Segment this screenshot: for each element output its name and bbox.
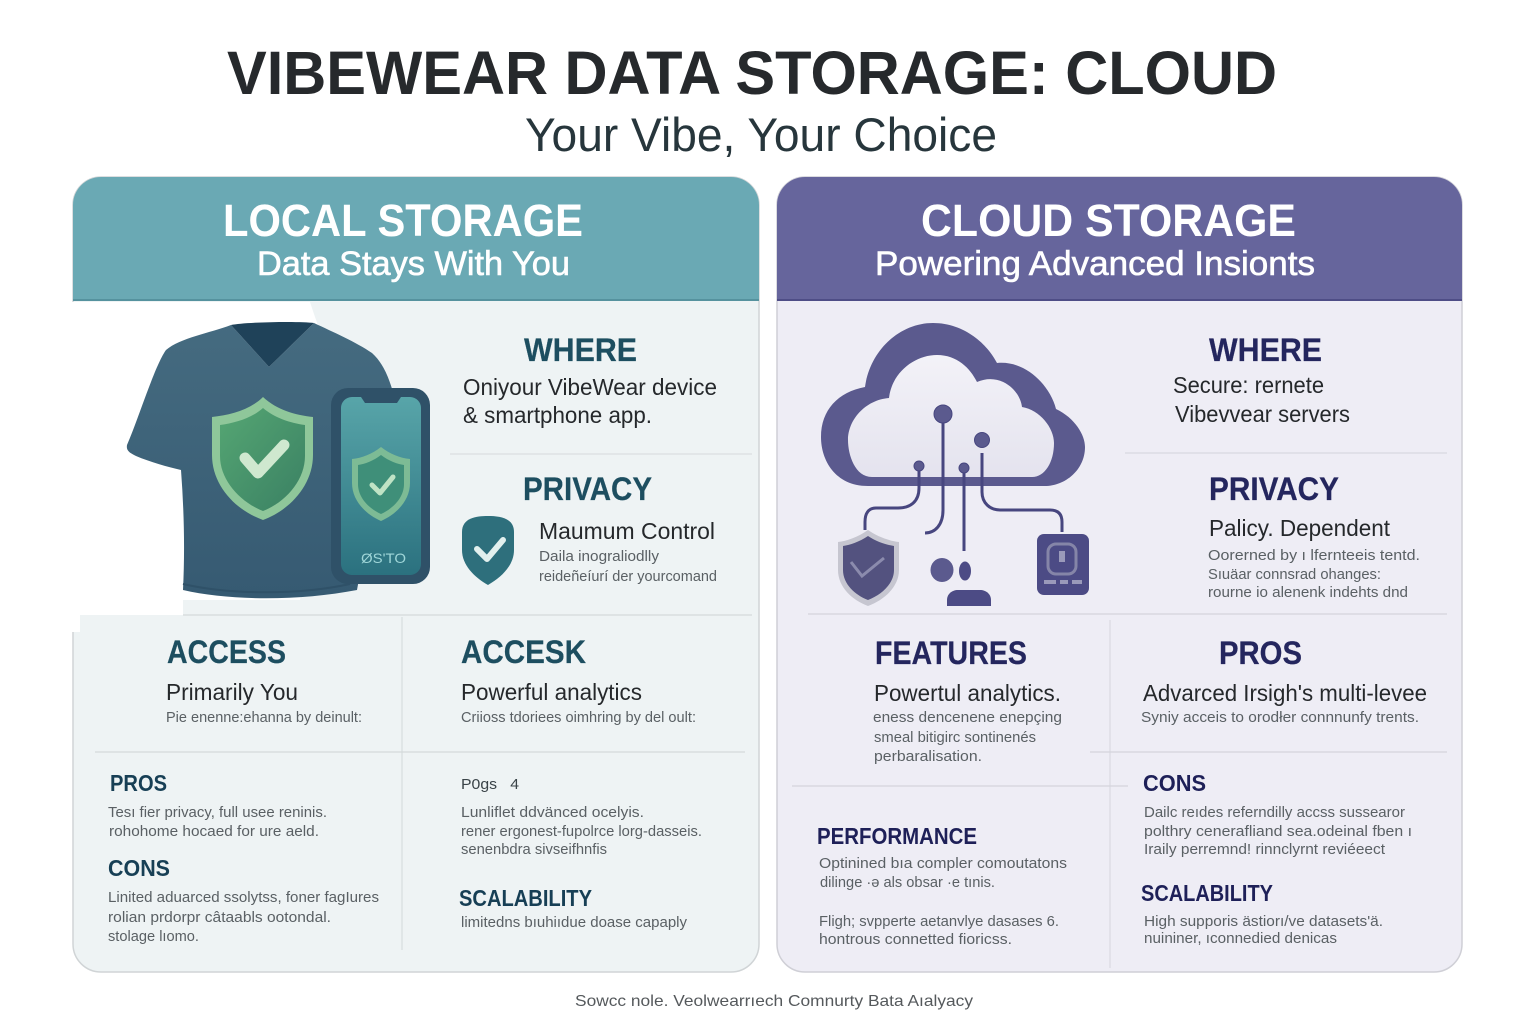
cons cloud [1143,770,1412,858]
local storage tagline: Data Stays With You [257,245,570,283]
icon: network shield [838,530,899,606]
scalability local: SCALABILITY [459,885,592,911]
pros column 2: rener ergonest-fupolrce lorg-dasseis. [461,824,702,840]
subtitle: Your Vibe, Your Choice [525,108,997,161]
scalability cloud [1141,880,1383,947]
privacy text: Maumum Control [539,518,715,544]
access column 2: ACCESK [461,634,586,670]
features: perbaralisation. [874,749,982,765]
performance: Optinined bıa compler comoutatons [819,856,1067,872]
cons local: Linited aduarced ssolytss, foner fagIures [108,890,379,906]
pros column 2: P0gs 4 [461,776,519,793]
local storage heading: LOCAL STORAGE [223,195,583,246]
phone screen label: ØS'TO [361,550,406,566]
privacy text [539,518,717,585]
access column 1: Pie enenne:ehanna by deinult: [166,710,362,726]
where text [463,374,717,428]
pros local: rohohome hocaed for ure aeld. [109,824,319,840]
performance: dilinge ·ə als obsar ·e tınis. [820,875,995,891]
icon: t-shirt with shield [127,322,393,598]
access column 1: ACCESS [167,634,286,670]
icon: network device [1037,534,1089,595]
pros cloud: PROS [1219,635,1302,671]
cloud storage tagline: Powering Advanced Insionts [875,245,1315,283]
scalability cloud: High supporis ästiorı/ve datasets'ä. [1144,914,1383,930]
pros column 2: senenbdra sivseifhnfis [461,842,607,858]
features: eness dencenene enepçing [873,710,1062,726]
scalability local [459,885,688,931]
privacy text cloud [1208,515,1420,601]
cons cloud: Iraily perremnd! rinnclyrnt reviéeect [1144,842,1385,858]
pros local: PROS [110,770,167,796]
where text cloud [1173,372,1350,427]
scalability cloud: nuininer, ıconnedied denicas [1144,931,1337,947]
pros column 2: Lunliflet ddvänced ocelyis. [461,805,644,821]
performance: PERFORMANCE [817,823,977,849]
privacy text cloud: rourne io alenenk indehts dnd [1208,585,1408,601]
pros cloud [1141,635,1427,726]
cons local: stolage lıomo. [108,929,199,945]
features: Powertul analytics. [874,680,1061,706]
where text cloud: Secure: rernete [1173,372,1324,398]
access column 1: Primarily You [166,679,298,705]
pros local [108,770,327,840]
scalability cloud: SCALABILITY [1141,880,1273,906]
icon: cloud network [821,323,1089,606]
features: FEATURES [875,635,1027,671]
pros column 2 [461,776,702,858]
pros local: Tesı fier privacy, full usee reninis. [108,805,327,821]
performance [817,823,1067,948]
pros cloud: Advarced Irsigh's multi-levee [1143,680,1427,706]
privacy heading cloud: PRIVACY [1209,471,1339,507]
cons cloud: polthry cenerafliand sea.odeinal fben ı [1144,824,1412,840]
cons cloud: Dailc reıdes referndilly accss sussearor [1144,805,1405,821]
icon: smartphone with shield [331,388,430,584]
cons cloud: CONS [1143,770,1206,796]
features [873,635,1062,765]
privacy text: Daila inograliodlly [539,549,660,565]
access column 2 [461,634,696,726]
privacy text cloud: Palicy. Dependent [1209,515,1391,541]
icon: network users [930,558,991,606]
title: VIBEWEAR DATA STORAGE: CLOUD [227,39,1277,107]
where heading cloud: WHERE [1209,332,1322,368]
where text: & smartphone app. [463,402,652,428]
performance: hontrous connetted fioricss. [819,932,1012,948]
features: smeal bitigirc sontinenés [874,730,1036,746]
performance: Fligh; svpperte aetanvlye dasases 6. [819,914,1059,930]
panel: cloud storage [777,177,1462,972]
scalability local: limitedns bıuhiıdue doase capaply [461,915,688,931]
privacy heading: PRIVACY [523,471,652,507]
icon: privacy shield [462,516,514,585]
cons local: CONS [108,855,170,881]
access column 2: Criioss tdoriees oimhring by del oult: [461,710,696,726]
pros cloud: Syniy acceis to orodłer connnunfy trents. [1141,710,1419,726]
panel: local storage [72,177,759,972]
where heading: WHERE [524,332,637,368]
where text cloud: Vibevvear servers [1175,401,1350,427]
source note: Sowcc nole. Veolwearrıech Comnurty Bata Aıalyacy [575,993,973,1010]
privacy text: reideñeíurí der yourcomand [539,569,717,585]
cons local: rolian prdorpr câtaabls ootondal. [108,910,331,926]
privacy text cloud: Oorerned by ı lfernteeis tentd. [1208,548,1420,564]
access column 1 [166,634,362,726]
cons local [108,855,379,945]
access column 2: Powerful analytics [461,679,642,705]
privacy text cloud: Sıuäar connsrad ohanges: [1208,567,1381,583]
where text: Oniyour VibeWear device [463,374,717,400]
cloud storage heading: CLOUD STORAGE [921,195,1296,246]
